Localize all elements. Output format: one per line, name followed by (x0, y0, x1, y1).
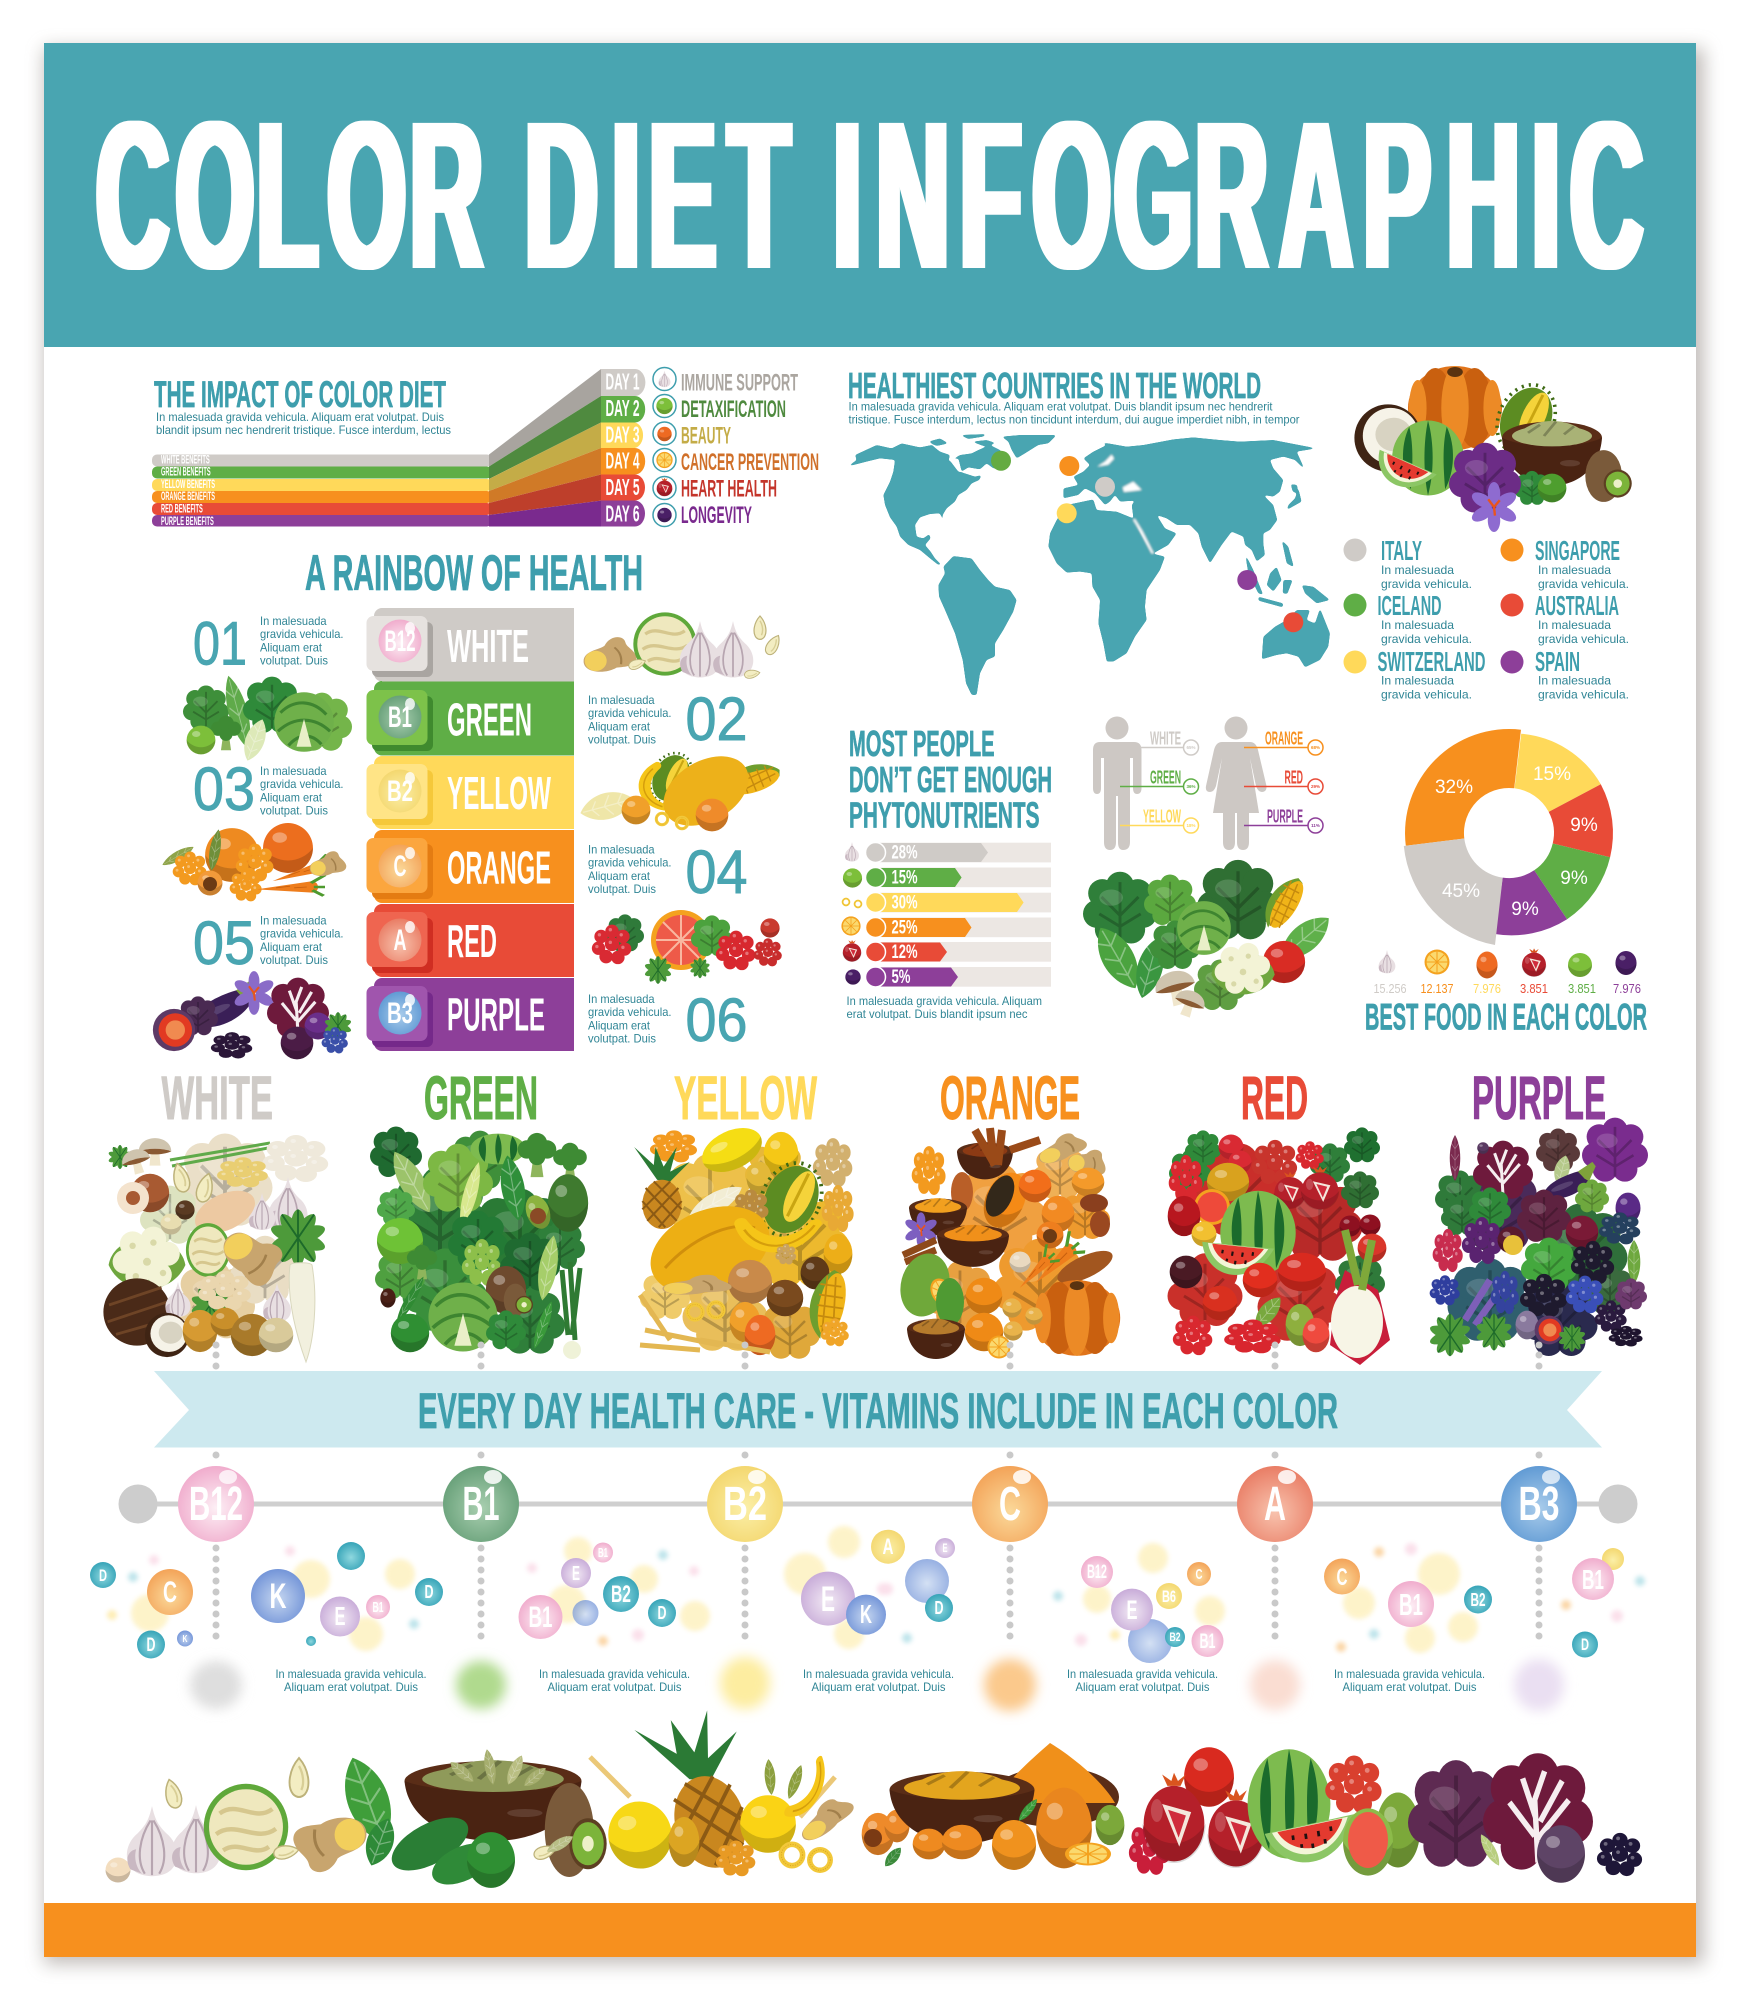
food: purple row (153, 971, 352, 1059)
donut legend values: 7.976 (1473, 981, 1501, 996)
figure callouts: ORANGE (1265, 728, 1303, 748)
bubbles: red column: B2 (1470, 1590, 1486, 1610)
heading: phytonutrients (849, 723, 1052, 836)
vitamin ball: B12: B12 (189, 1478, 243, 1531)
benefit labels: HEART HEALTH (681, 476, 777, 502)
row descriptions: Aliquam erat (260, 790, 323, 804)
vitamin descriptions (276, 1667, 1485, 1694)
figure callouts: RED (1284, 768, 1303, 788)
rainbow row: red: A (394, 924, 406, 957)
bottom food strip (106, 1704, 1642, 1893)
food: white row (584, 612, 783, 679)
vitamin bubbles (90, 1530, 1624, 1663)
legend: countries: AUSTRALIA (1535, 590, 1619, 621)
bubbles: purple column (1572, 1548, 1624, 1658)
donut chart: 32% (1435, 777, 1473, 798)
bubbles: yellow column: K (860, 1599, 872, 1629)
timeline connector dots (212, 1342, 1542, 1640)
donut legend values: 7.976 (1613, 981, 1641, 996)
donut legend values: 12.137 (1420, 981, 1454, 996)
bubbles: yellow column: E (821, 1580, 835, 1619)
vitamin descriptions: In malesuada gravida vehicula. (1334, 1667, 1485, 1681)
bar chart: 25% (892, 918, 918, 938)
vitamin descriptions: In malesuada gravida vehicula. (1067, 1667, 1218, 1681)
legend: countries: In malesuada (1381, 618, 1454, 632)
row descriptions: volutpat. Duis (588, 1032, 656, 1046)
bubbles: white column: K (270, 1577, 286, 1616)
figure: man (1093, 716, 1142, 850)
rainbow row: yellow (366, 756, 574, 829)
bubbles: green column: B1 (598, 1545, 608, 1560)
bubbles: green column: E (572, 1563, 580, 1585)
legend: countries: In malesuada (1381, 563, 1454, 577)
legend: countries: In malesuada (1538, 563, 1611, 577)
text block: healthiest: tristique. Fusce interdum, lectus non tincidunt interdum, dui augue imperdiet nibh, in tempor (848, 412, 1300, 426)
bubbles: red column: B1 (1399, 1587, 1423, 1622)
row descriptions: Aliquam erat (588, 869, 651, 883)
numbers: 06 (686, 986, 748, 1054)
bubbles: green column: B2 (611, 1581, 631, 1608)
vitamin ball: B2 (707, 1466, 783, 1542)
bar chart (841, 842, 1051, 988)
figure callouts: WHITE (1150, 728, 1181, 748)
figure callouts: YELLOW (1143, 806, 1181, 826)
food: orange row (160, 823, 346, 901)
legend: countries: ICELAND (1378, 590, 1442, 621)
food: mixed fruit cluster (1354, 366, 1632, 532)
numbers: 02 (686, 685, 748, 753)
panel: rainbow of health (153, 545, 786, 1059)
vitamin descriptions: Aliquam erat volutpat. Duis (548, 1680, 682, 1694)
bubbles: orange column: B2 (1170, 1630, 1181, 1644)
legend: countries: In malesuada (1381, 674, 1454, 688)
color column headings: WHITE (162, 1064, 273, 1132)
row descriptions: gravida vehicula. (588, 1005, 672, 1019)
legend: countries: gravida vehicula. (1381, 688, 1472, 702)
bubbles: green column (518, 1542, 676, 1639)
text block: phytonutrients: In malesuada gravida vehicula. Aliquam (846, 994, 1042, 1008)
vitamin ball: C: C (999, 1478, 1021, 1531)
text block: phytonutrients (846, 994, 1042, 1021)
food: yellow row (577, 742, 786, 840)
benefit labels: DETAXIFICATION (681, 396, 786, 423)
rainbow row: green (366, 681, 574, 756)
benefit labels: IMMUNE SUPPORT (681, 370, 798, 396)
legend: countries: SINGAPORE (1535, 535, 1620, 566)
numbers: 01 (193, 610, 247, 678)
row descriptions: In malesuada (260, 614, 327, 628)
figure callouts: PURPLE (1267, 806, 1303, 826)
rainbow row: white: WHITE (447, 620, 529, 672)
food square: green (370, 1127, 588, 1359)
row descriptions: In malesuada (588, 992, 655, 1006)
rainbow row: yellow: YELLOW (447, 767, 551, 819)
rainbow row: orange: C (394, 850, 406, 883)
map markers (991, 451, 1303, 632)
text block: phytonutrients: erat volutpat. Duis blandit ipsum nec (846, 1007, 1028, 1021)
row descriptions: volutpat. Duis (260, 804, 328, 818)
panel: healthiest countries (847, 365, 1632, 702)
row descriptions: gravida vehicula. (588, 706, 672, 720)
benefit labels: CANCER PREVENTION (681, 449, 819, 476)
figure callouts: 68% (1311, 745, 1320, 750)
row descriptions: Aliquam erat (588, 1018, 651, 1032)
legend: countries: ITALY (1381, 535, 1422, 566)
row descriptions: gravida vehicula. (260, 926, 344, 940)
bubbles: orange column: E (1126, 1595, 1138, 1625)
bar chart: 15% (892, 868, 918, 888)
bar chart: 28% (892, 842, 918, 864)
bubbles: yellow column: D (934, 1598, 944, 1618)
bubbles: orange column: B1 (1200, 1630, 1216, 1653)
chart: stacked ribbons: RED BENEFITS (161, 504, 203, 516)
bubbles: green column: B1 (528, 1601, 552, 1634)
row descriptions: volutpat. Duis (260, 953, 328, 967)
row descriptions: gravida vehicula. (260, 627, 344, 641)
chart: stacked ribbons: GREEN BENEFITS (161, 466, 211, 478)
rainbow row: red (366, 904, 574, 977)
chart: stacked ribbons (152, 369, 601, 528)
bubbles: yellow column: A (882, 1534, 894, 1559)
food square: yellow (634, 1119, 854, 1359)
legend: countries: gravida vehicula. (1538, 577, 1629, 591)
donut chart: 45% (1442, 881, 1480, 902)
text block: healthiest (848, 400, 1300, 426)
row descriptions: In malesuada (588, 842, 655, 856)
bubbles: orange column: B12 (1087, 1562, 1107, 1583)
vitamin ball: A (1237, 1466, 1313, 1542)
chart: stacked ribbons: ORANGE BENEFITS (161, 491, 215, 503)
bubbles: white column: D (99, 1566, 107, 1585)
food: red row (592, 910, 782, 984)
donut chart: 15% (1533, 764, 1571, 785)
bubbles: purple column: B1 (1582, 1564, 1604, 1595)
vitamin descriptions: Aliquam erat volutpat. Duis (284, 1680, 418, 1694)
row descriptions: Aliquam erat (260, 940, 323, 954)
food: green row (183, 673, 352, 764)
vitamin descriptions: In malesuada gravida vehicula. (803, 1667, 954, 1681)
legend: countries: gravida vehicula. (1381, 577, 1472, 591)
legend: countries: gravida vehicula. (1381, 632, 1472, 646)
vitamin ball: B1 (443, 1466, 519, 1542)
donut chart (1404, 729, 1613, 945)
bubbles: red column: C (1336, 1564, 1348, 1591)
row descriptions: Aliquam erat (260, 640, 323, 654)
donut chart: 9% (1560, 868, 1588, 889)
vitamin timeline (118, 1466, 1638, 1542)
food square: red (1168, 1127, 1390, 1365)
chart: stacked ribbons: WHITE BENEFITS (161, 454, 210, 466)
legend: countries: gravida vehicula. (1538, 632, 1629, 646)
donut legend values: 3.851 (1520, 981, 1548, 996)
vitamin ball: C (972, 1466, 1048, 1542)
color column headings (162, 1064, 1606, 1132)
day tabs: DAY 3 (606, 422, 640, 448)
figure callouts: 18% (1186, 823, 1196, 828)
day tabs (601, 368, 645, 526)
legend: countries (1344, 535, 1629, 702)
rainbow row: green: GREEN (447, 694, 532, 746)
donut legend values: 3.851 (1568, 981, 1596, 996)
chart: stacked ribbons: PURPLE BENEFITS (161, 516, 214, 528)
vitamin descriptions: Aliquam erat volutpat. Duis (812, 1680, 946, 1694)
benefit icons (653, 368, 676, 526)
color column headings: RED (1241, 1064, 1308, 1132)
title: COLOR DIET INFOGRAPHIC (96, 78, 1643, 314)
row descriptions: gravida vehicula. (260, 777, 344, 791)
color column headings: GREEN (424, 1064, 538, 1132)
vitamin descriptions: Aliquam erat volutpat. Duis (1076, 1680, 1210, 1694)
figure callouts: 29% (1311, 784, 1320, 789)
row descriptions: In malesuada (260, 914, 327, 928)
bubbles: yellow column: E (942, 1541, 948, 1555)
benefit labels (681, 370, 819, 529)
bubbles: white column: E (334, 1601, 346, 1631)
bubbles: orange column: C (1196, 1566, 1203, 1583)
bubbles: green column: D (658, 1603, 666, 1623)
footer band (44, 1903, 1696, 1957)
row descriptions: volutpat. Duis (588, 732, 656, 746)
row descriptions: gravida vehicula. (588, 856, 672, 870)
rainbow row: orange (366, 830, 574, 903)
color column headings: YELLOW (674, 1064, 817, 1132)
vitamin ball: B3: B3 (1518, 1478, 1560, 1531)
blurred vitamin bubbles (107, 1526, 1645, 1653)
bubbles: red column (1324, 1558, 1492, 1627)
figure: woman (1206, 716, 1267, 850)
text block: impact: In malesuada gravida vehicula. Aliquam erat volutpat. Duis (156, 410, 444, 424)
numbers: 05 (193, 909, 255, 977)
chart: stacked ribbons: YELLOW BENEFITS (161, 479, 215, 491)
vitamin ball: B12 (178, 1466, 254, 1542)
heading: healthiest: HEALTHIEST COUNTRIES IN THE WORLD (848, 365, 1261, 406)
legend: countries: SWITZERLAND (1378, 646, 1486, 677)
rainbow row: white: B12 (384, 625, 416, 658)
day tabs: DAY 5 (606, 474, 640, 500)
donut legend values (1374, 981, 1641, 996)
bubbles: white column: C (163, 1576, 177, 1609)
world map (847, 434, 1330, 695)
row descriptions: In malesuada (588, 693, 655, 707)
rainbow row: purple: B3 (387, 997, 413, 1030)
heading: phytonutrients: PHYTONUTRIENTS (849, 794, 1040, 836)
rainbow row: white (366, 608, 574, 682)
figure callouts: 65% (1186, 745, 1196, 750)
heading: impact: THE IMPACT OF COLOR DIET (154, 374, 446, 415)
food: vegetable cluster (1083, 860, 1338, 1021)
row descriptions (260, 614, 672, 1046)
vitamin descriptions: In malesuada gravida vehicula. (276, 1667, 426, 1681)
benefit labels: BEAUTY (681, 422, 731, 450)
bubbles: purple column: D (1581, 1635, 1589, 1654)
food square: orange (894, 1128, 1120, 1359)
rainbow row: red: RED (447, 915, 497, 967)
banner (154, 1371, 1602, 1448)
row descriptions: volutpat. Duis (588, 882, 656, 896)
numbers: 04 (686, 838, 748, 906)
heading: rainbow: A RAINBOW OF HEALTH (305, 545, 643, 601)
day tabs: DAY 6 (606, 500, 640, 526)
day tabs: DAY 1 (606, 368, 640, 394)
bubbles: yellow column (801, 1530, 955, 1635)
donut legend icons (1379, 948, 1637, 978)
heading: phytonutrients: DON’T GET ENOUGH (849, 759, 1052, 800)
bubbles: white column (90, 1542, 443, 1658)
bubbles: white column: B1 (372, 1599, 384, 1616)
vitamin descriptions: Aliquam erat volutpat. Duis (1342, 1680, 1476, 1694)
donut legend values: 15.256 (1374, 981, 1406, 996)
vitamin ball: A: A (1264, 1478, 1286, 1531)
figure callouts: 36% (1186, 784, 1196, 789)
bar chart: 12% (892, 942, 918, 963)
panel: phytonutrients (841, 716, 1338, 1021)
bubbles: white column: K (182, 1634, 188, 1645)
donut chart: 9% (1511, 899, 1539, 920)
rainbow row: orange: ORANGE (447, 842, 551, 894)
blurred color drops (190, 1657, 1564, 1711)
legend: countries: In malesuada (1538, 674, 1611, 688)
benefit labels: LONGEVITY (681, 502, 752, 529)
bubbles: white column: D (424, 1582, 434, 1602)
bubbles: orange column: B6 (1162, 1587, 1176, 1606)
vitamin ball: B3 (1501, 1466, 1577, 1542)
text block: impact (156, 410, 451, 437)
panel: impact of color diet (152, 368, 819, 529)
vitamin descriptions: In malesuada gravida vehicula. (539, 1667, 690, 1681)
row descriptions: Aliquam erat (588, 720, 651, 734)
rainbow row: yellow: B2 (387, 775, 413, 808)
vitamin ball: B2: B2 (723, 1478, 767, 1531)
numbers: 03 (193, 755, 255, 823)
figure callouts (1120, 728, 1323, 833)
rainbow row: green: B1 (388, 701, 412, 734)
numbers (193, 610, 748, 1054)
rainbow row: purple: PURPLE (447, 988, 545, 1040)
legend: countries: gravida vehicula. (1538, 688, 1629, 702)
row descriptions: In malesuada (260, 764, 327, 778)
food square: purple (1428, 1118, 1648, 1356)
color column headings: ORANGE (940, 1064, 1080, 1132)
legend: countries: In malesuada (1538, 618, 1611, 632)
donut chart: 9% (1570, 815, 1598, 836)
day tabs: DAY 2 (606, 395, 640, 421)
day tabs: DAY 4 (606, 448, 640, 474)
row descriptions: volutpat. Duis (260, 654, 328, 668)
bubbles: orange column (1081, 1556, 1224, 1663)
panel: donut chart best food (1365, 729, 1647, 1038)
color column headings: PURPLE (1472, 1064, 1606, 1132)
food square: white (103, 1133, 328, 1362)
heading: phytonutrients: MOST PEOPLE (849, 723, 995, 764)
rainbow row: purple (366, 978, 574, 1051)
legend: countries: SPAIN (1535, 646, 1580, 677)
text block: impact: blandit ipsum nec hendrerit tristique. Fusce interdum, lectus (156, 423, 451, 437)
figure callouts: GREEN (1150, 768, 1181, 788)
figure callouts: 11% (1311, 823, 1320, 828)
bubbles: white column: D (146, 1635, 156, 1656)
bar chart: 30% (892, 892, 918, 914)
bar chart: 5% (892, 967, 911, 988)
text block: healthiest: In malesuada gravida vehicula. Aliquam erat volutpat. Duis blandit ipsum nec hendrerit (848, 400, 1273, 414)
header band (44, 43, 1696, 347)
vitamin ball: B1: B1 (462, 1478, 500, 1531)
